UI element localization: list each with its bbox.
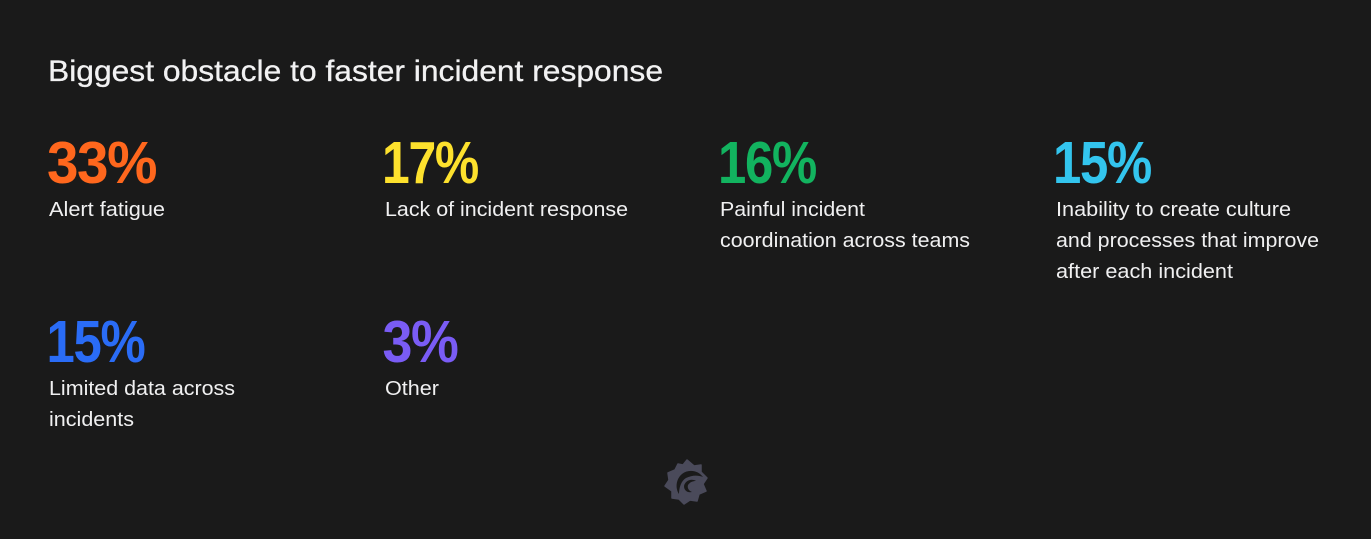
stat: 15% inability to create culture: and processes that improve (1056, 230, 1319, 252)
stat: 17% lack of incident response: 17% (382, 130, 478, 196)
stat: 33% alert fatigue (47, 130, 165, 221)
stat: 15% limited data across incidents: 15% (46, 309, 145, 375)
stat: 3% other: Other (385, 378, 439, 400)
stat: 17% lack of incident response (382, 130, 628, 221)
stat: 15% limited data across incidents: Limited data across (49, 378, 235, 400)
stat: 16% painful incident coordination: Painful incident (720, 199, 865, 221)
stat: 16% painful incident coordination (718, 130, 970, 252)
stat: 16% painful incident coordination: 16% (718, 130, 816, 196)
title: Biggest obstacle to faster incident response (48, 55, 663, 88)
stat: 33% alert fatigue: Alert fatigue (49, 199, 165, 221)
stat: 15% limited data across incidents (46, 309, 235, 431)
stat: 15% inability to create culture: 15% (1053, 130, 1151, 196)
stat: 33% alert fatigue: 33% (47, 130, 156, 196)
stat: 15% limited data across incidents: incidents (49, 409, 134, 431)
icon: Grafana logo (665, 460, 707, 504)
stat: 15% inability to create culture: Inability to create culture (1056, 199, 1291, 221)
stat: 3% other (382, 309, 458, 400)
stat: 15% inability to create culture: after each incident (1056, 261, 1233, 283)
stat: 16% painful incident coordination: coordination across teams (720, 230, 970, 252)
stat: 3% other: 3% (382, 309, 458, 375)
stat: 15% inability to create culture (1053, 130, 1319, 283)
stat: 17% lack of incident response: Lack of incident response (385, 199, 628, 221)
